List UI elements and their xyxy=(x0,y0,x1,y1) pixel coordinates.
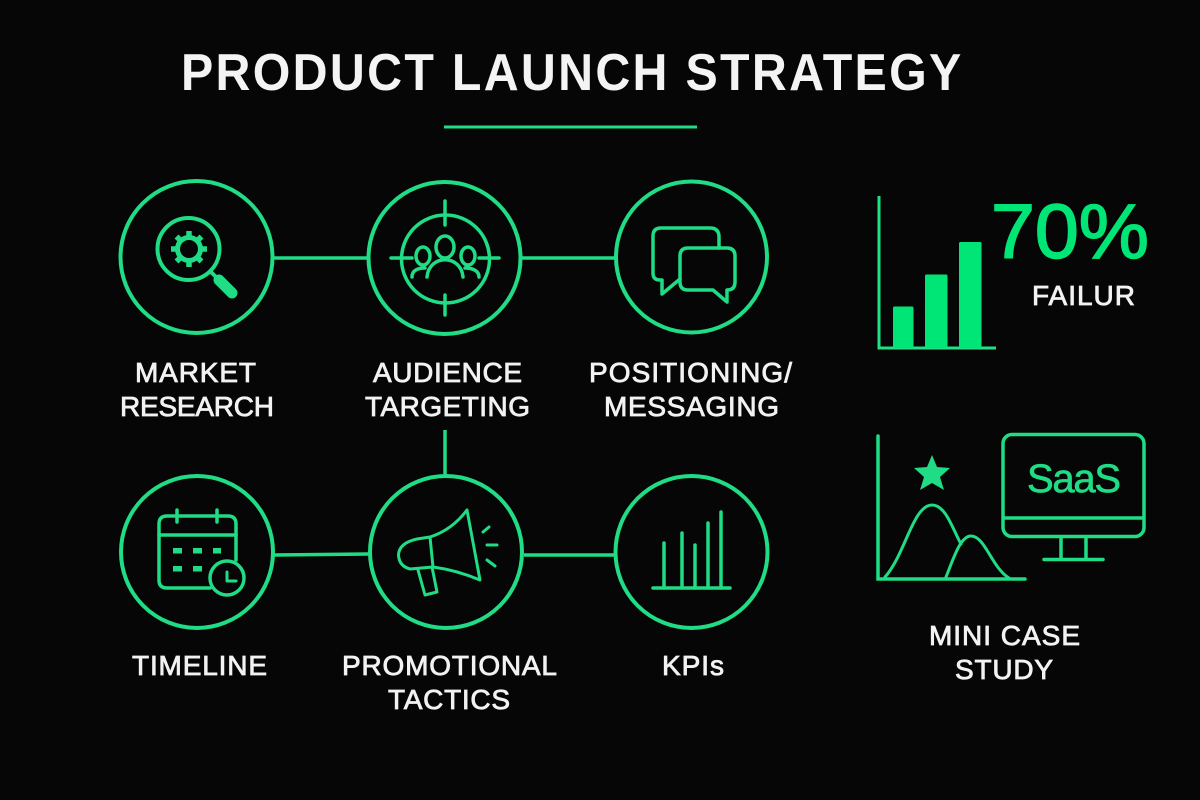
label: market research: RESEARCH xyxy=(120,391,274,422)
label: positioning and messaging: MESSAGING xyxy=(604,391,779,422)
icon: KPI bars xyxy=(653,512,730,588)
label: positioning and messaging xyxy=(589,357,792,422)
panel: failure statistic xyxy=(879,189,1149,348)
label: promotional tactics: PROMOTIONAL xyxy=(342,650,557,681)
label: promotional tactics: TACTICS xyxy=(388,684,510,715)
title: PRODUCT LAUNCH STRATEGY xyxy=(181,43,961,101)
label: audience targeting: AUDIENCE xyxy=(373,357,522,388)
label: market research xyxy=(120,357,274,422)
label: audience targeting xyxy=(365,357,530,422)
label: promotional tactics xyxy=(342,650,557,715)
icon: speech bubbles xyxy=(653,228,735,302)
icon: megaphone xyxy=(398,510,497,595)
panel: timeline xyxy=(121,476,273,681)
panel: mini case study xyxy=(878,434,1144,685)
icon: magnifier with gear xyxy=(158,218,232,293)
icon: SaaS monitor: SaaS xyxy=(1027,457,1121,501)
chart: peaks with star xyxy=(878,436,1025,579)
panel: market research xyxy=(120,181,274,422)
label: KPIs: KPIs xyxy=(662,650,724,681)
statistic: 70%: 70% xyxy=(991,189,1149,275)
panel: positioning and messaging xyxy=(589,182,792,422)
label: positioning and messaging: POSITIONING/ xyxy=(589,357,792,388)
bar chart xyxy=(879,196,996,348)
label: audience targeting: TARGETING xyxy=(365,391,530,422)
panel: KPIs xyxy=(616,476,768,681)
label: mini case study: MINI CASE xyxy=(929,620,1080,651)
icon: SaaS monitor xyxy=(1003,434,1144,560)
connector lines xyxy=(274,258,615,555)
panel: audience targeting xyxy=(365,182,530,422)
label: timeline: TIMELINE xyxy=(132,650,267,681)
icon: calendar with clock xyxy=(159,510,244,595)
label: failure: FAILUR xyxy=(1032,280,1135,311)
label: market research: MARKET xyxy=(135,357,256,388)
icon: target with people xyxy=(391,201,499,315)
label: mini case study xyxy=(929,620,1080,685)
panel: promotional tactics xyxy=(342,476,557,715)
label: mini case study: STUDY xyxy=(955,654,1053,685)
